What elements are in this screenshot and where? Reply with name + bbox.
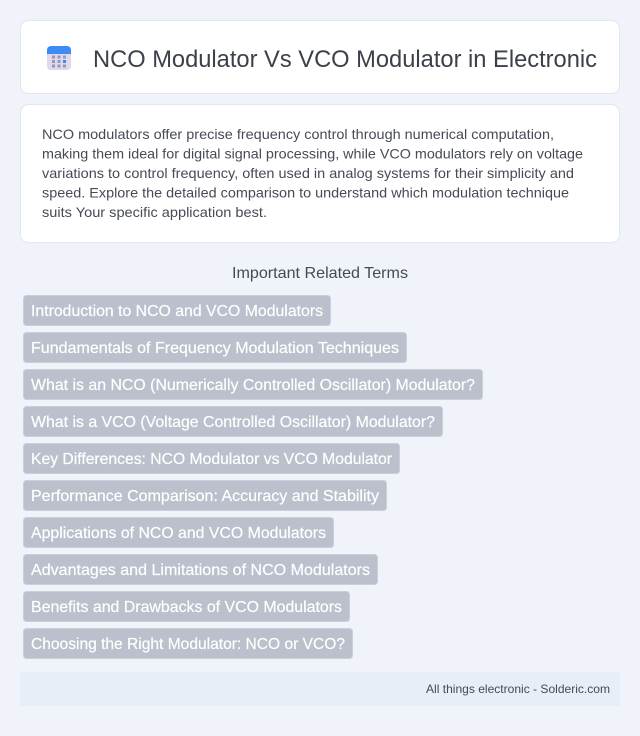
- title card: [20, 20, 620, 94]
- term 1: [24, 296, 330, 326]
- term 6: Performance Comparison: Accuracy and Stability: [31, 488, 379, 505]
- description text: NCO modulators offer precise frequency control through numerical computation,: [42, 126, 554, 142]
- term 7: Applications of NCO and VCO Modulators: [31, 525, 326, 542]
- icon: calendar: [47, 46, 71, 70]
- term 2: [24, 332, 406, 362]
- term 9: [24, 592, 350, 622]
- term 5: [24, 444, 400, 474]
- description text: [42, 126, 583, 220]
- term 1: Introduction to NCO and VCO Modulators: [31, 303, 323, 320]
- term 6: [24, 480, 386, 510]
- description text: suits Your specific application best.: [42, 204, 267, 220]
- term 9: Benefits and Drawbacks of VCO Modulators: [31, 599, 342, 616]
- title: NCO Modulator Vs VCO Modulator in Electronic: [93, 46, 597, 73]
- description text: making them ideal for digital signal processing, while VCO modulators rely on voltage: [42, 146, 583, 162]
- list of related terms: [24, 296, 482, 658]
- term 8: Advantages and Limitations of NCO Modulators: [31, 562, 370, 579]
- panel: description: [20, 104, 620, 242]
- term 10: [24, 628, 352, 658]
- term 5: Key Differences: NCO Modulator vs VCO Modulator: [31, 451, 393, 468]
- description text: variations to control frequency, often used in analog systems for their simplicity and: [42, 165, 574, 181]
- footer: All things electronic - Solderic.com: [426, 682, 610, 696]
- term 10: Choosing the Right Modulator: NCO or VCO?: [31, 636, 345, 653]
- description text: speed. Explore the detailed comparison to understand which modulation technique: [42, 184, 569, 200]
- term 4: [24, 406, 442, 436]
- footer: [20, 672, 620, 706]
- heading: important related terms: Important Related Terms: [232, 265, 408, 282]
- term 3: [24, 370, 482, 400]
- term 7: [24, 518, 334, 548]
- term 8: [24, 554, 378, 584]
- term 2: Fundamentals of Frequency Modulation Techniques: [31, 340, 399, 357]
- term 3: What is an NCO (Numerically Controlled Oscillator) Modulator?: [31, 377, 475, 394]
- term 4: What is a VCO (Voltage Controlled Oscillator) Modulator?: [31, 414, 435, 431]
